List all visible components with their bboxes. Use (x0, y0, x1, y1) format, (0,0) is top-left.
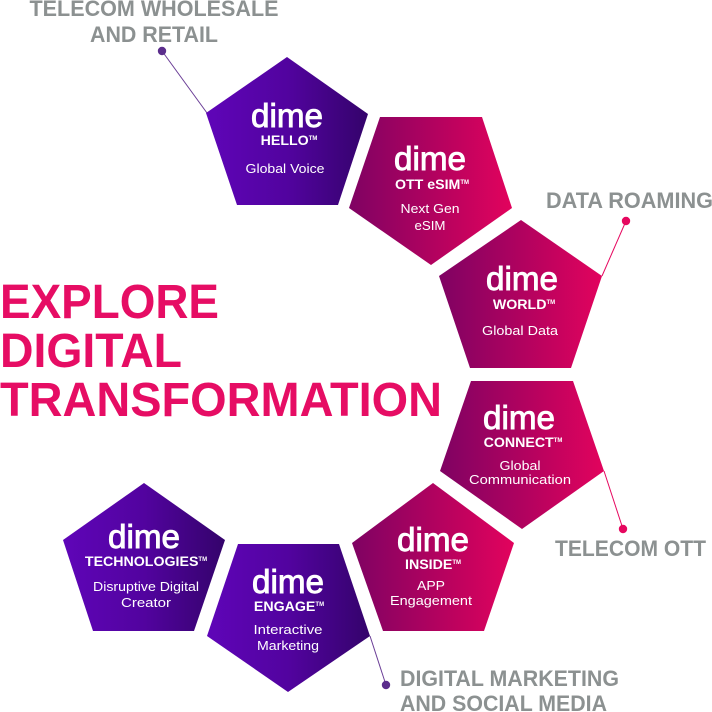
panel: dime engage: dime (252, 563, 324, 600)
panel: dime connect: dime (483, 399, 555, 436)
heading: TRANSFORMATION (0, 374, 442, 427)
panel: dime connect: Communication (469, 472, 571, 487)
label: digital marketing and social media: DIGITAL MARKETING (400, 666, 619, 691)
panel: dime technologies: dime (108, 518, 180, 555)
panel: dime world: TM (546, 300, 555, 306)
panel: dime ott esim: OTT eSIM (395, 177, 460, 193)
panel: dime technologies (63, 483, 225, 631)
panel: dime connect: CONNECT (484, 435, 554, 451)
panel: dime engage: Marketing (257, 638, 319, 653)
connector: digital marketing (370, 636, 390, 689)
panel: dime hello: TM (309, 136, 317, 142)
panel: dime ott esim: eSIM (414, 218, 446, 233)
panel: dime connect (440, 381, 604, 529)
panel: dime connect: Global (500, 458, 541, 473)
panel: dime hello: HELLO (261, 133, 309, 149)
panel: dime connect: TM (554, 438, 562, 444)
panel: dime engage: Interactive (254, 622, 322, 637)
label: digital marketing and social media (400, 666, 619, 712)
panel: dime ott esim: TM (460, 180, 469, 186)
panel: dime inside: TM (452, 560, 461, 566)
panel: dime technologies: Disruptive Digital (93, 579, 199, 594)
heading (0, 276, 442, 427)
panel: dime inside: APP (417, 578, 445, 593)
label: telecom ott: TELECOM OTT (555, 536, 707, 561)
connector: data roaming (602, 217, 630, 276)
panel: dime hello: dime (251, 97, 323, 134)
connector: telecom wholesale (158, 47, 207, 113)
panel: dime technologies: TECHNOLOGIES (85, 554, 198, 570)
panel: dime technologies: Creator (121, 595, 172, 610)
label: data roaming: DATA ROAMING (546, 188, 712, 213)
panel: dime ott esim: dime (394, 140, 466, 177)
heading: DIGITAL (0, 325, 182, 378)
panel: dime engage (207, 544, 370, 692)
panel: dime world: WORLD (493, 297, 546, 313)
heading: EXPLORE (0, 276, 219, 329)
panel: dime engage: TM (315, 602, 324, 608)
panel: dime ott esim: Next Gen (400, 201, 460, 216)
panel: dime ott esim (349, 117, 512, 265)
panel: dime inside: INSIDE (405, 557, 452, 573)
panel: dime world (439, 220, 602, 368)
connector: telecom ott (604, 471, 627, 533)
panel: dime inside: dime (397, 521, 469, 558)
panel: dime inside: Engagement (390, 593, 472, 608)
panel: dime hello (206, 57, 368, 205)
panel: dime inside (352, 483, 514, 631)
label: telecom wholesale and retail (30, 0, 278, 47)
panel: dime world: Global Data (482, 323, 559, 338)
panel: dime technologies: TM (198, 557, 207, 563)
label: telecom wholesale and retail: AND RETAIL (90, 22, 218, 47)
panel: dime world: dime (486, 260, 558, 297)
panel: dime hello: Global Voice (246, 161, 324, 176)
panel: dime engage: ENGAGE (254, 599, 315, 615)
